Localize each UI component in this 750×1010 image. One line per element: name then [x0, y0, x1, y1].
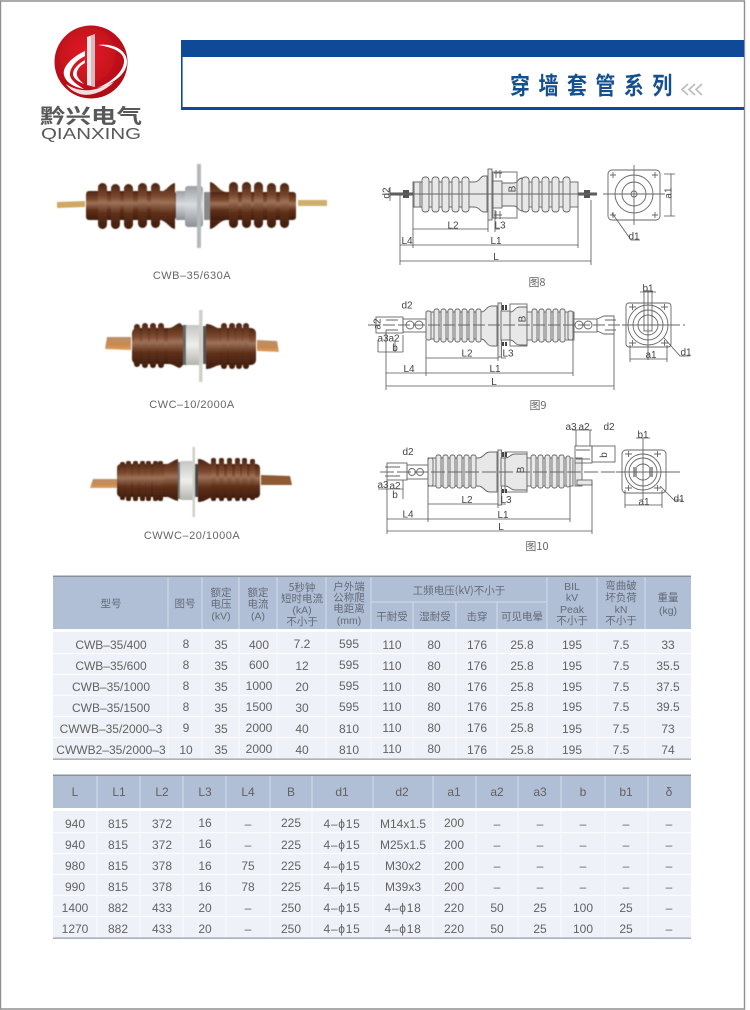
- row 5: 882: [108, 901, 128, 915]
- row: CWB-35/600: CWB–35/600: [75, 659, 147, 673]
- row: CWB-35/1500: CWB–35/1500: [72, 701, 150, 715]
- header background: [53, 576, 691, 629]
- row: CWB-35/1000: 195: [562, 680, 582, 694]
- row 2: –: [494, 838, 501, 852]
- row: CWB-35/400: 7.5: [613, 638, 630, 652]
- row: CWWB-35/2000-3: 2000: [246, 721, 273, 735]
- row: CWB-35/600: 35.5: [656, 659, 680, 673]
- header text: [100, 578, 679, 629]
- row 5: –: [666, 901, 673, 915]
- row 6: 50: [490, 922, 504, 936]
- product photo: CWC-10/2000A: [105, 310, 279, 382]
- row: CWB-35/1500: 595: [339, 700, 359, 714]
- dimension labels: d2: [603, 422, 615, 433]
- header text: 重量: [658, 590, 679, 605]
- header text: b: [580, 785, 587, 799]
- header text: 击穿: [466, 609, 488, 624]
- logo: [40, 26, 142, 143]
- row 1: –: [623, 817, 630, 831]
- row: CWWB2-35/2000-3: 80: [427, 742, 441, 756]
- row: CWWB2-35/2000-3: 25.8: [510, 743, 534, 757]
- row 2: 815: [108, 838, 128, 852]
- row: CWB-35/400: [75, 637, 675, 652]
- header text: 电压: [210, 596, 232, 612]
- row 6: 4–ϕ18: [385, 922, 421, 936]
- row 6: 100: [573, 922, 593, 936]
- row: CWWB2-35/2000-3: 810: [339, 743, 359, 757]
- row: CWB-35/600: 176: [467, 659, 487, 673]
- row: CWB-35/600: 110: [382, 659, 402, 673]
- dimension labels: B: [516, 466, 527, 473]
- row 5: 20: [198, 901, 212, 915]
- diagram: figure 8: [382, 165, 675, 290]
- row: CWB-35/1500: 110: [382, 700, 402, 714]
- dimension labels: d1: [628, 232, 640, 242]
- header text: 不小于: [605, 613, 637, 628]
- row 1: 16: [198, 816, 212, 830]
- header banner: [181, 40, 744, 110]
- row 4: –: [623, 880, 630, 894]
- header text: a1: [447, 785, 461, 799]
- row 6: –: [245, 922, 252, 936]
- row 4: –: [580, 880, 587, 894]
- header text: 不小于: [286, 614, 318, 629]
- header text: a3: [533, 785, 547, 799]
- logo latin name: QIANXING: [41, 126, 141, 143]
- row 3: –: [666, 859, 673, 873]
- header text: L3: [198, 785, 212, 799]
- row: CWWB2-35/2000-3: 7.5: [613, 743, 630, 757]
- dimension labels: B: [518, 315, 528, 322]
- side view: [380, 446, 680, 505]
- row: CWWB2-35/2000-3: [56, 742, 675, 757]
- row: CWB-35/1500: 8: [183, 700, 190, 714]
- row: CWWB2-35/2000-3: 2000: [246, 742, 273, 756]
- header text: Peak: [560, 604, 585, 616]
- dimension labels: b: [392, 343, 398, 354]
- row 1: –: [494, 817, 501, 831]
- header text: a2: [490, 785, 504, 799]
- dimension labels: a3: [565, 422, 577, 433]
- row: CWWB2-35/2000-3: 195: [562, 743, 582, 757]
- product photo: CWWC-20/1000A: [90, 447, 292, 517]
- row 4: 378: [152, 880, 172, 894]
- table: electrical specifications: [53, 576, 691, 760]
- row 5: 220: [444, 901, 464, 915]
- row: CWB-35/400: CWB–35/400: [75, 638, 147, 652]
- row 3: 16: [198, 859, 212, 873]
- row 2: [65, 837, 673, 852]
- row: CWWB-35/2000-3: CWWB–35/2000–3: [60, 722, 163, 736]
- row: CWB-35/1000: 595: [339, 679, 359, 693]
- row 3: 225: [281, 859, 301, 873]
- header text: δ: [666, 785, 673, 799]
- row 1: 940: [65, 817, 85, 831]
- header text: [72, 785, 673, 799]
- header text: 额定: [210, 585, 232, 600]
- row: CWWB-35/2000-3: 9: [183, 721, 190, 735]
- header text: 坏负荷: [605, 590, 637, 605]
- row 5: 1400: [62, 901, 89, 915]
- row: CWB-35/600: 8: [183, 658, 190, 672]
- row 1: 200: [444, 816, 464, 830]
- row: CWWB-35/2000-3: 25.8: [510, 721, 534, 735]
- row: CWB-35/1500: 39.5: [656, 700, 680, 714]
- side view: [368, 303, 685, 357]
- header text: 短时电流: [281, 591, 323, 606]
- header text: BIL: [564, 581, 580, 593]
- row 6: 220: [444, 922, 464, 936]
- row 4: –: [666, 880, 673, 894]
- row: CWB-35/600: 80: [427, 659, 441, 673]
- row 2: 4–ϕ15: [324, 838, 360, 852]
- row: CWB-35/1000: 8: [183, 679, 190, 693]
- row 5: 25: [619, 901, 633, 915]
- caption: CWC–10/2000A: [149, 399, 235, 411]
- row 4: –: [537, 880, 544, 894]
- logo name: 黔兴电气: [40, 100, 142, 129]
- row: CWB-35/1000: 7.5: [613, 680, 630, 694]
- dimension labels: b: [392, 490, 398, 501]
- header text: kV: [566, 592, 578, 604]
- row 6: 20: [198, 922, 212, 936]
- dimension labels: b: [599, 452, 610, 458]
- row 6: –: [666, 922, 673, 936]
- row 2: 940: [65, 838, 85, 852]
- dimension labels: a3: [377, 334, 389, 344]
- dimension labels: L1: [490, 236, 502, 247]
- row 4: 225: [281, 880, 301, 894]
- row 2: 16: [198, 837, 212, 851]
- row: CWWB2-35/2000-3: 10: [179, 743, 193, 757]
- row 4: M39x3: [385, 880, 421, 894]
- dimension labels: L1: [489, 364, 501, 375]
- row: CWWB-35/2000-3: 7.5: [613, 722, 630, 736]
- row 3: M30x2: [385, 859, 421, 873]
- header text: b1: [619, 785, 633, 799]
- row 1: M14x1.5: [380, 817, 426, 831]
- row 1: 225: [281, 816, 301, 830]
- dimension labels: a2: [389, 481, 401, 492]
- row: CWB-35/1000: CWB–35/1000: [72, 680, 150, 694]
- header text: 额定: [248, 585, 269, 600]
- dimension labels: a1: [638, 497, 650, 508]
- row: CWB-35/600: 12: [295, 659, 309, 673]
- row: CWB-35/1000: 110: [382, 680, 402, 694]
- row: CWWB-35/2000-3: 810: [339, 722, 359, 736]
- header text: (A): [251, 610, 265, 622]
- row 1: 4–ϕ15: [324, 817, 360, 831]
- row 2: 200: [444, 838, 464, 852]
- dimension labels: a2: [578, 422, 590, 433]
- dimension labels: L3: [502, 348, 514, 360]
- dimension labels: d2: [382, 187, 392, 199]
- header text: 型号: [100, 596, 122, 611]
- row: CWB-35/1000: 20: [295, 680, 309, 694]
- row: CWB-35/600: 195: [562, 659, 582, 673]
- row 6: 25: [619, 922, 633, 936]
- dimension labels: L2: [461, 495, 473, 506]
- row: CWWB-35/2000-3: 195: [562, 722, 582, 736]
- dimension labels: L2: [447, 220, 459, 232]
- row: CWB-35/400: 110: [382, 638, 402, 652]
- row: CWB-35/1500: 35: [214, 701, 228, 715]
- row 4: [65, 880, 673, 894]
- header text: L1: [112, 785, 126, 799]
- row: CWWB-35/2000-3: 176: [467, 721, 487, 735]
- dimension labels: L1: [497, 510, 509, 521]
- row 1: 372: [152, 817, 172, 831]
- row: CWB-35/400: 33: [661, 638, 675, 652]
- row: CWWB-35/2000-3: 73: [661, 722, 675, 736]
- caption: 图8: [528, 274, 546, 290]
- dimension labels: d1: [673, 494, 685, 505]
- row: CWB-35/400: 25.8: [510, 638, 534, 652]
- row: CWB-35/400: 176: [467, 638, 487, 652]
- row: CWWB-35/2000-3: 40: [295, 722, 309, 736]
- row 2: 225: [281, 838, 301, 852]
- row 5: 25: [533, 901, 547, 915]
- header text: 户外端: [333, 579, 365, 594]
- dimension labels: a1: [645, 350, 657, 361]
- row 5: 100: [573, 901, 593, 915]
- row: CWB-35/1500: [72, 700, 680, 715]
- row: CWWB-35/2000-3: 80: [427, 721, 441, 735]
- dimension labels: L4: [402, 510, 414, 520]
- row: CWB-35/400: 35: [214, 638, 228, 652]
- caption: CWB–35/630A: [153, 270, 231, 282]
- row: CWB-35/600: 595: [339, 658, 359, 672]
- header text: (mm): [337, 615, 361, 627]
- caption: CWWC–20/1000A: [144, 530, 240, 542]
- row 5: 50: [490, 901, 504, 915]
- row 6: 433: [152, 922, 172, 936]
- dimension labels: a1: [664, 187, 674, 199]
- row 3: 4–ϕ15: [324, 859, 360, 873]
- row: CWB-35/1000: 80: [427, 680, 441, 694]
- row: CWB-35/1000: 176: [467, 680, 487, 694]
- row: CWWB2-35/2000-3: 176: [467, 743, 487, 757]
- header text: (kA): [292, 604, 312, 616]
- row: CWB-35/1000: 25.8: [510, 680, 534, 694]
- dimension lines: [378, 330, 614, 390]
- header text: 5秒钟: [289, 580, 315, 595]
- row 2: –: [580, 838, 587, 852]
- end view: [603, 165, 675, 240]
- dimension labels: L4: [401, 236, 413, 247]
- header text: L2: [155, 785, 169, 799]
- row 1: –: [245, 817, 252, 831]
- dimension labels: d2: [402, 447, 414, 458]
- row: CWB-35/1000: 1000: [246, 679, 273, 693]
- row: CWB-35/1000: [72, 679, 680, 694]
- dimension labels: L: [493, 252, 499, 263]
- row: CWWB2-35/2000-3: CWWB2–35/2000–3: [56, 743, 166, 757]
- row 5: 4–ϕ15: [324, 901, 360, 915]
- dimension labels: a2: [388, 334, 400, 344]
- row: CWB-35/600: 35: [214, 659, 228, 673]
- row: CWB-35/1500: 80: [427, 700, 441, 714]
- header text: 干耐受: [376, 609, 408, 624]
- data rows background: [53, 632, 691, 760]
- table: dimensions: [53, 774, 691, 939]
- icon: chevrons: [682, 84, 702, 95]
- row 6: 4–ϕ15: [324, 922, 360, 936]
- dimension labels: [382, 185, 674, 263]
- row: CWWB2-35/2000-3: 110: [382, 742, 402, 756]
- row: CWB-35/1500: 195: [562, 700, 582, 714]
- header text: (kg): [659, 605, 677, 617]
- dimension labels: B: [508, 185, 518, 192]
- row: CWB-35/1500: 30: [295, 701, 309, 715]
- row: CWWB-35/2000-3: 110: [382, 721, 402, 735]
- data rows background: [53, 811, 691, 939]
- diagram: figure 10: [377, 422, 685, 554]
- row 5: –: [245, 901, 252, 915]
- dimension labels: b1: [637, 430, 649, 441]
- end view: [616, 438, 683, 508]
- row 2: –: [245, 838, 252, 852]
- header text: d2: [395, 785, 409, 799]
- header text: d1: [335, 785, 349, 799]
- row 5: 433: [152, 901, 172, 915]
- row: CWWB-35/2000-3: [60, 721, 675, 736]
- diagram: figure 9: [368, 284, 692, 413]
- header background: [53, 774, 691, 808]
- row 3: [65, 859, 673, 873]
- row 1: 815: [108, 817, 128, 831]
- side view: [385, 169, 597, 220]
- header text: 电流: [248, 596, 269, 612]
- dimension labels: L3: [500, 495, 512, 506]
- header text: (kV): [211, 610, 231, 622]
- header text: 工频电压(kV)不小于: [413, 583, 505, 598]
- row 2: M25x1.5: [380, 838, 426, 852]
- row 6: 25: [533, 922, 547, 936]
- dimension labels: b1: [642, 284, 654, 294]
- row 6: [62, 922, 673, 936]
- title: 穿墙套管系列: [510, 67, 681, 102]
- caption: 图9: [529, 397, 547, 413]
- row 4: 200: [444, 880, 464, 894]
- row 6: 882: [108, 922, 128, 936]
- row: CWB-35/600: [75, 658, 680, 673]
- dimension labels: a3: [377, 480, 389, 491]
- header text: 公称爬: [333, 590, 365, 605]
- row 3: –: [623, 859, 630, 873]
- row: CWB-35/400: 7.2: [294, 637, 311, 651]
- row 1: [65, 816, 673, 831]
- row 3: 815: [108, 859, 128, 873]
- row 1: –: [580, 817, 587, 831]
- end view: [622, 290, 690, 362]
- dimension lines: [390, 187, 591, 265]
- row: CWB-35/1500: 176: [467, 700, 487, 714]
- dimension labels: L3: [494, 220, 506, 232]
- row 2: –: [537, 838, 544, 852]
- row: CWB-35/600: 600: [249, 658, 269, 672]
- row: CWB-35/1000: 35: [214, 680, 228, 694]
- row: CWB-35/400: 595: [339, 637, 359, 651]
- dimension labels: [377, 422, 685, 533]
- row 3: –: [580, 859, 587, 873]
- row 3: –: [537, 859, 544, 873]
- row 3: –: [494, 859, 501, 873]
- row 4: 815: [108, 880, 128, 894]
- row: CWB-35/400: 8: [183, 637, 190, 651]
- row: CWWB2-35/2000-3: 35: [214, 743, 228, 757]
- row 5: 4–ϕ18: [385, 901, 421, 915]
- row: CWB-35/400: 400: [249, 638, 269, 652]
- row: CWWB-35/2000-3: 35: [214, 722, 228, 736]
- row: CWB-35/400: 195: [562, 638, 582, 652]
- dimension labels: L4: [403, 364, 415, 375]
- row: CWWB2-35/2000-3: 74: [661, 743, 675, 757]
- row 1: –: [537, 817, 544, 831]
- row 5: 250: [281, 901, 301, 915]
- row: CWB-35/1500: 7.5: [613, 700, 630, 714]
- dimension labels: d1: [680, 348, 692, 358]
- dimension labels: [372, 284, 692, 388]
- row 4: 4–ϕ15: [324, 880, 360, 894]
- row 4: –: [494, 880, 501, 894]
- row 5: [62, 901, 673, 915]
- dimension labels: L2: [461, 348, 473, 360]
- row 6: 1270: [62, 922, 89, 936]
- header text: 图号: [174, 596, 196, 611]
- row 2: 372: [152, 838, 172, 852]
- row: CWB-35/1500: 25.8: [510, 700, 534, 714]
- row 6: 250: [281, 922, 301, 936]
- dimension labels: L: [491, 377, 497, 388]
- dimension labels: a2: [372, 318, 384, 330]
- header text: L4: [241, 785, 255, 799]
- row: CWB-35/600: 7.5: [613, 659, 630, 673]
- row 3: 75: [241, 859, 255, 873]
- dimension labels: d2: [401, 300, 413, 312]
- header text: kN: [615, 604, 627, 616]
- row 4: 16: [198, 880, 212, 894]
- row: CWB-35/1000: 37.5: [656, 680, 680, 694]
- row 4: 78: [241, 880, 255, 894]
- icon: red circle emblem: [54, 26, 128, 98]
- row 3: 200: [444, 859, 464, 873]
- header text: L: [72, 785, 79, 799]
- header text: 可见电晕: [501, 609, 543, 624]
- row 4: 990: [65, 880, 85, 894]
- row: CWWB2-35/2000-3: 40: [295, 743, 309, 757]
- row 3: 378: [152, 859, 172, 873]
- dimension labels: L: [498, 522, 504, 533]
- header text: 弯曲破: [605, 578, 637, 593]
- caption: 图10: [525, 538, 549, 554]
- row 2: –: [623, 838, 630, 852]
- header text: B: [287, 785, 295, 799]
- header text: 湿耐受: [419, 609, 451, 624]
- header text: 不小于: [556, 613, 588, 628]
- row 2: –: [666, 838, 673, 852]
- row: CWB-35/600: 25.8: [510, 659, 534, 673]
- header text: 电距离: [333, 601, 365, 616]
- product photo: CWB-35/630A: [57, 164, 327, 248]
- dimension lines: [378, 430, 592, 534]
- row 1: –: [666, 817, 673, 831]
- row: CWB-35/1500: 1500: [246, 700, 273, 714]
- row: CWB-35/400: 80: [427, 638, 441, 652]
- row 3: 980: [65, 859, 85, 873]
